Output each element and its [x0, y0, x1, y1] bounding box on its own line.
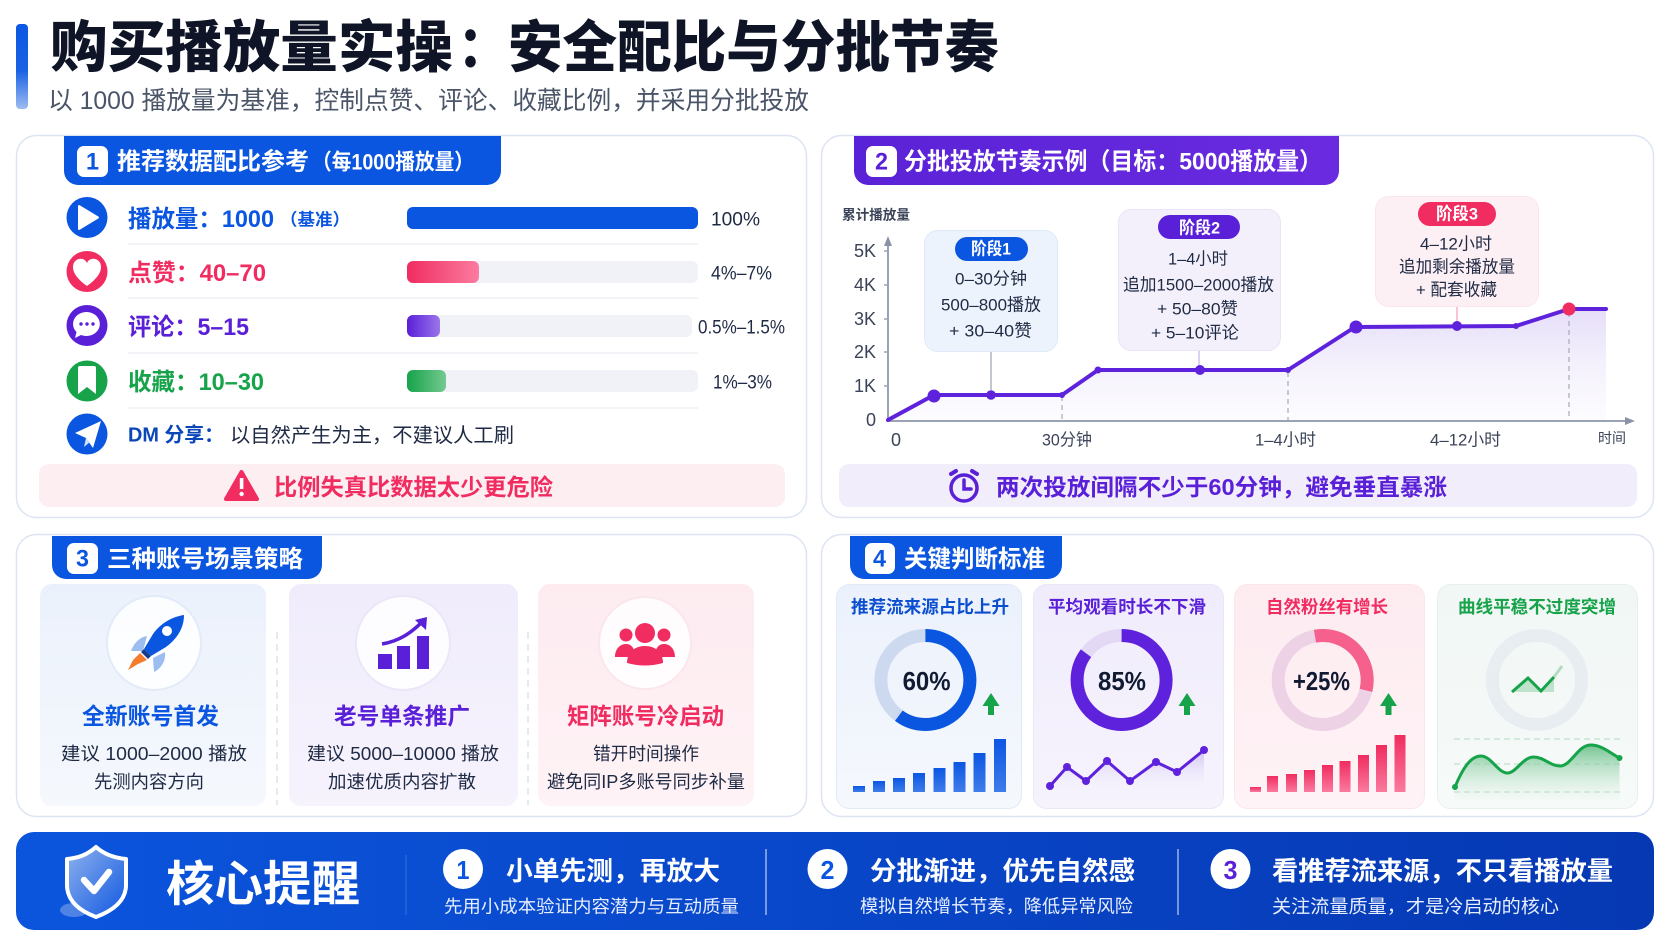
icon: rocket	[128, 615, 184, 672]
axis tick marks	[884, 251, 888, 386]
heading: panel 1: （每1000播放量）	[312, 150, 474, 174]
icon: warning triangle	[226, 472, 257, 499]
chart markers	[928, 302, 1576, 402]
panel: batch delivery rhythm	[822, 136, 1654, 518]
card: stable curve: 曲线平稳不过度突增	[1458, 597, 1616, 617]
row dividers	[128, 244, 698, 408]
card: watch time: 平均观看时长不下滑	[1048, 597, 1206, 617]
card: matrix account	[538, 584, 754, 806]
reminder 2	[808, 849, 1135, 916]
heading: panel 2: 分批投放节奏示例（目标：5000播放量）	[904, 148, 1322, 176]
card: organic followers: +25%	[1293, 666, 1350, 696]
row: DM share	[66, 414, 514, 454]
callout: stage 1: 阶段1	[971, 238, 1011, 258]
row: plays: （基准）	[280, 210, 350, 230]
reminder 2: 分批渐进，优先自然感	[870, 856, 1135, 886]
icon: rising bars	[378, 617, 429, 669]
reminder 1: 小单先测，再放大	[506, 856, 720, 886]
heading: panel 3: 三种账号场景策略	[107, 546, 303, 573]
heading: panel 2	[854, 136, 1339, 185]
row: comments	[66, 305, 785, 346]
x axis labels: 0	[891, 430, 901, 450]
card: new account: 全新账号首发	[82, 703, 219, 729]
heading: panel 3: 3	[76, 546, 89, 572]
callout: stage 3: 阶段3	[1436, 204, 1478, 224]
reminder 1: 1	[456, 855, 470, 885]
icon: play	[66, 197, 108, 238]
card: matrix account: 错开时间操作	[593, 744, 699, 764]
heading: panel 1: 1	[86, 148, 99, 176]
x axis labels	[891, 430, 1626, 450]
callout: stage 1: 500–800播放	[941, 296, 1041, 314]
card: new account: 建议 1000–2000 播放	[61, 744, 247, 764]
card: matrix account: 避免同IP多账号同步补量	[547, 772, 745, 792]
banner: core reminders	[16, 832, 1654, 930]
row: favorites	[66, 360, 772, 402]
chart area fill	[888, 309, 1606, 421]
line chart	[842, 206, 1635, 450]
heading: panel 1	[64, 136, 501, 185]
panel: key criteria	[822, 534, 1654, 816]
card: recommended traffic: 推荐流来源占比上升	[851, 597, 1009, 617]
card: recommended traffic: 60%	[903, 666, 951, 696]
reminder 1: 先用小成本验证内容潜力与互动质量	[444, 896, 739, 916]
reminder 3: 看推荐流来源，不只看播放量	[1272, 856, 1613, 886]
row: plays: 播放量：1000	[128, 206, 274, 233]
callout: stage 2: 1–4小时	[1168, 250, 1228, 268]
row: plays	[66, 197, 760, 238]
bar chart	[1250, 735, 1406, 792]
row: likes: 4%–7%	[711, 264, 772, 284]
callout: interval note: 两次投放间隔不少于60分钟，避免垂直暴涨	[996, 474, 1447, 500]
row: DM share: 以自然产生为主，不建议人工刷	[230, 424, 514, 447]
title: 购买播放量实操	[50, 16, 453, 78]
title: ：	[458, 16, 508, 78]
callout: stage 2	[1118, 210, 1280, 350]
icon: heart	[66, 251, 108, 292]
title accent bar	[16, 24, 28, 109]
trend line	[888, 309, 1606, 420]
row: favorites: 1%–3%	[713, 372, 772, 394]
callout: stage 3	[1376, 196, 1538, 306]
subtitle: 以 1000 播放量为基准，控制点赞、评论、收藏比例，并采用分批投放	[48, 87, 809, 115]
y axis labels: 3K	[854, 309, 876, 329]
y axis labels: 1K	[854, 376, 876, 396]
callout: stage 2: 阶段2	[1179, 218, 1220, 238]
row: DM share: DM 分享：	[128, 424, 224, 446]
heading: panel 4: 关键判断标准	[904, 546, 1045, 573]
card: old account: 建议 5000–10000 播放	[307, 744, 499, 764]
y axis labels: 2K	[854, 342, 876, 362]
callout: stage 3: 4–12小时	[1420, 234, 1492, 254]
dashed card dividers	[277, 632, 528, 805]
row: comments: 0.5%–1.5%	[698, 318, 785, 338]
card: stable curve	[1438, 584, 1638, 808]
card: old account: 加速优质内容扩散	[328, 772, 476, 792]
x axis labels: 时间	[1598, 430, 1626, 446]
row: likes: 点赞：40–70	[128, 260, 266, 287]
bar chart	[853, 739, 1006, 792]
donut: 85%	[1077, 636, 1166, 724]
reminder 2: 2	[820, 855, 834, 885]
icon: alarm clock	[951, 471, 977, 501]
heading: panel 4	[850, 536, 1062, 579]
icon: up arrow	[1178, 693, 1196, 715]
banner heading: 核心提醒	[166, 858, 360, 912]
card: matrix account: 矩阵账号冷启动	[567, 703, 724, 729]
heading: panel 2: 2	[875, 148, 888, 176]
divider	[405, 855, 407, 915]
panel: three account scenarios	[16, 534, 806, 816]
x axis labels: 30分钟	[1042, 430, 1092, 450]
heading: panel 1: 推荐数据配比参考	[117, 148, 309, 176]
reminder 3	[1210, 849, 1613, 917]
heading: panel 4: 4	[873, 546, 887, 572]
icon: people group	[615, 623, 675, 666]
reminder 3: 关注流量质量，才是冷启动的核心	[1272, 896, 1559, 917]
icon: speech bubble	[66, 305, 108, 346]
callout: interval note	[839, 464, 1637, 507]
dashed guides	[1062, 312, 1569, 420]
callout: stage 1: 0–30分钟	[955, 270, 1027, 288]
x axis labels: 1–4小时	[1255, 430, 1316, 450]
heading: panel 3	[52, 536, 322, 579]
card: old account: 老号单条推广	[334, 703, 470, 729]
row: favorites: 收藏：10–30	[128, 369, 264, 396]
sparkline	[1046, 746, 1208, 790]
donut: 60%	[881, 636, 970, 724]
callout: distortion warning	[39, 464, 785, 507]
callout: stage 1	[924, 230, 1058, 352]
donut: stable ring	[1492, 636, 1582, 724]
callout: stage 2: + 5–10评论	[1151, 324, 1239, 342]
title: 安全配比与分批节奏	[508, 16, 999, 78]
reminder 3: 3	[1224, 855, 1238, 885]
y axis labels: 0	[866, 410, 876, 430]
panel: recommended data ratio	[16, 136, 806, 518]
callout: stage 2: 追加1500–2000播放	[1123, 276, 1274, 294]
card: old account	[289, 584, 518, 806]
y axis labels: 5K	[854, 241, 876, 261]
row: likes	[66, 251, 772, 292]
callout: stage 2: + 50–80赞	[1157, 300, 1238, 318]
divider	[1177, 849, 1179, 915]
card: organic followers: 自然粉丝有增长	[1266, 597, 1388, 617]
reminder 2: 模拟自然增长节奏，降低异常风险	[860, 896, 1133, 916]
card: watch time	[1034, 584, 1224, 808]
icon: bookmark	[66, 360, 108, 402]
x axis labels: 4–12小时	[1430, 430, 1501, 450]
icon: paper plane	[66, 414, 108, 454]
axes	[888, 241, 1630, 421]
callout: distortion warning: 比例失真比数据太少更危险	[274, 474, 553, 500]
y axis labels	[854, 241, 876, 430]
donut: +25%	[1271, 628, 1374, 732]
callout: stage 3: + 配套收藏	[1416, 280, 1497, 300]
card: new account: 先测内容方向	[94, 772, 204, 792]
icon: shield	[60, 847, 126, 917]
y axis title: 累计播放量	[842, 206, 910, 222]
card: watch time: 85%	[1098, 666, 1146, 696]
row: comments: 评论：5–15	[128, 314, 249, 341]
icon: up arrow	[982, 693, 1000, 715]
callout: stage 1: + 30–40赞	[949, 322, 1032, 340]
reminder 1	[443, 849, 739, 916]
card: organic followers	[1234, 584, 1424, 808]
icon: up arrow	[1380, 693, 1397, 715]
row: plays: 100%	[711, 210, 760, 230]
divider	[765, 849, 767, 915]
card: new account	[40, 584, 266, 806]
card: recommended traffic	[836, 584, 1022, 808]
connectors	[990, 351, 992, 390]
y axis labels: 4K	[854, 275, 876, 295]
callout: stage 3: 追加剩余播放量	[1399, 258, 1515, 276]
area chart	[1452, 739, 1622, 800]
